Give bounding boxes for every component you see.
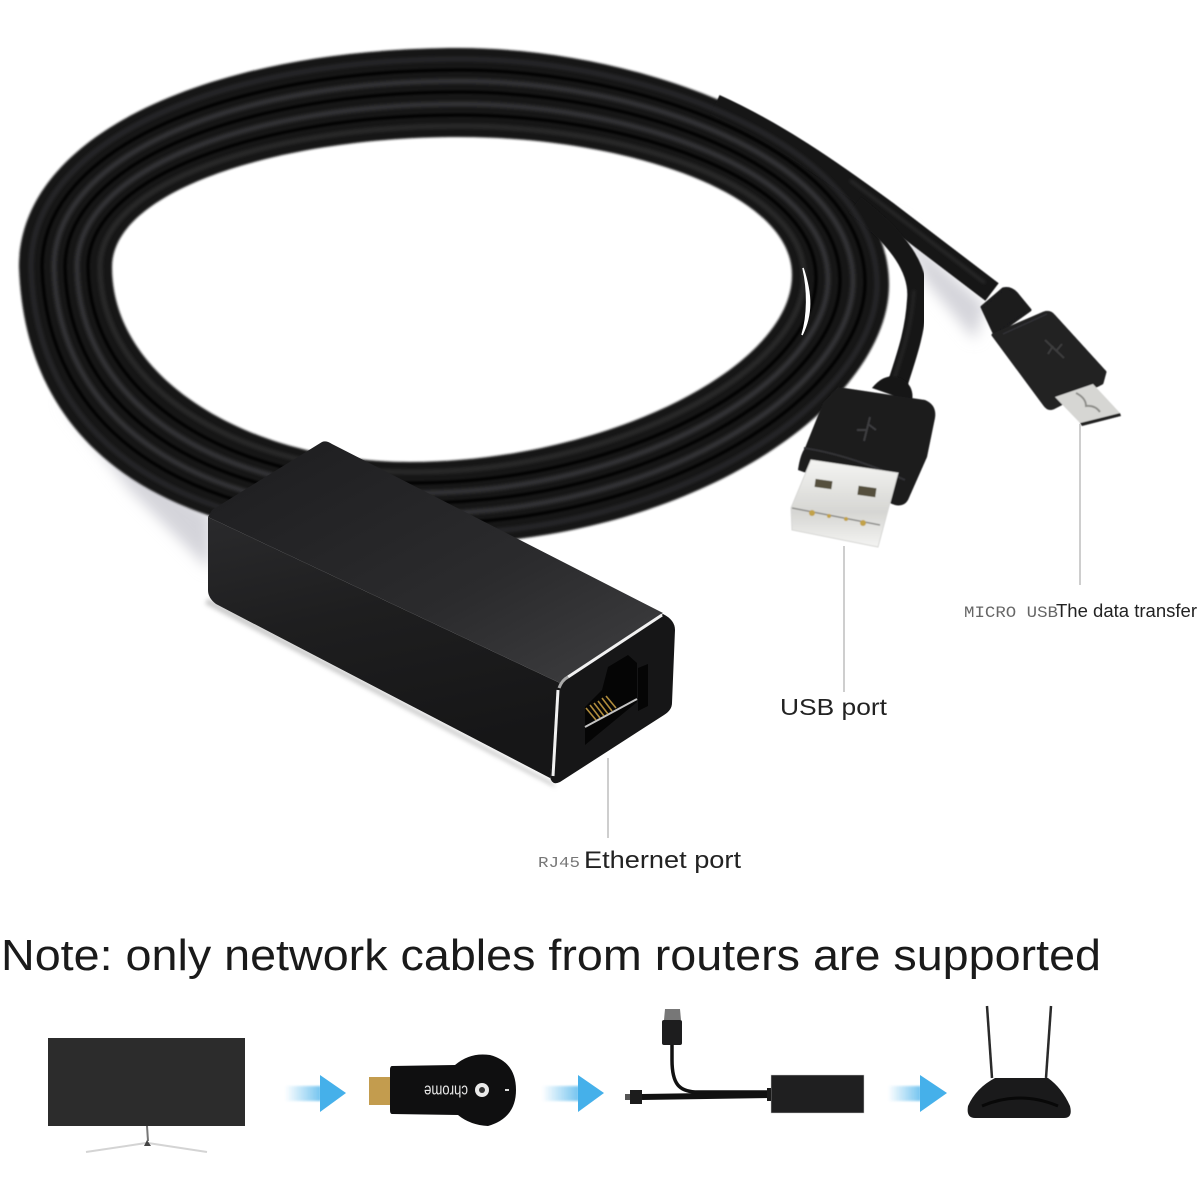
coil body xyxy=(19,48,889,545)
adapter side face xyxy=(208,517,560,778)
icon: adapter with cables xyxy=(625,1009,864,1113)
arrow 3 xyxy=(888,1075,947,1112)
coiled black cable xyxy=(19,48,992,570)
connection diagram xyxy=(48,1006,1071,1152)
leader line: micro USB xyxy=(1079,424,1081,585)
icon: chromecast dongle: chrome xyxy=(424,1082,468,1101)
USB cable strand xyxy=(855,205,917,392)
icon: router xyxy=(968,1006,1071,1118)
white sliver in coil xyxy=(802,268,810,335)
icon: chromecast dongle xyxy=(369,1054,516,1126)
icon: TV xyxy=(48,1038,245,1152)
leader line: USB port xyxy=(843,546,845,692)
plug boot xyxy=(798,387,935,505)
label: USB port: USB port xyxy=(780,694,888,720)
cable separators xyxy=(42,70,865,524)
label: RJ45 Ethernet port: RJ45 xyxy=(538,855,580,872)
arrow 1 xyxy=(285,1075,346,1112)
bright front edges xyxy=(568,615,662,677)
RJ45 port xyxy=(585,655,648,745)
contact holes xyxy=(815,479,832,489)
strain relief xyxy=(982,288,1030,335)
label: micro USB: The data transfer xyxy=(1056,601,1197,621)
adapter front face xyxy=(550,614,675,783)
adapter top face xyxy=(208,441,663,683)
plug boot xyxy=(993,312,1105,408)
label: micro USB: MICRO USB xyxy=(964,604,1058,622)
note heading: Note: only network cables from routers are supported xyxy=(1,931,1101,980)
gold pins xyxy=(809,510,866,526)
USB A plug xyxy=(791,376,935,547)
micro USB plug xyxy=(982,288,1121,426)
cable highlights xyxy=(31,59,985,535)
adapter shadow xyxy=(205,598,556,788)
strain relief xyxy=(872,376,912,402)
label: RJ45 Ethernet port xyxy=(538,847,741,874)
leader line: Ethernet port xyxy=(607,758,609,838)
micro USB cable strand xyxy=(715,105,992,292)
USB symbol xyxy=(857,417,876,441)
arrow 2 xyxy=(542,1075,604,1112)
label: micro USB xyxy=(964,601,1197,622)
USB symbol xyxy=(1045,340,1064,358)
metal shell xyxy=(791,460,898,547)
metal tip xyxy=(1055,384,1120,423)
label: RJ45 Ethernet port: Ethernet port xyxy=(584,847,741,874)
ethernet adapter xyxy=(205,441,675,788)
